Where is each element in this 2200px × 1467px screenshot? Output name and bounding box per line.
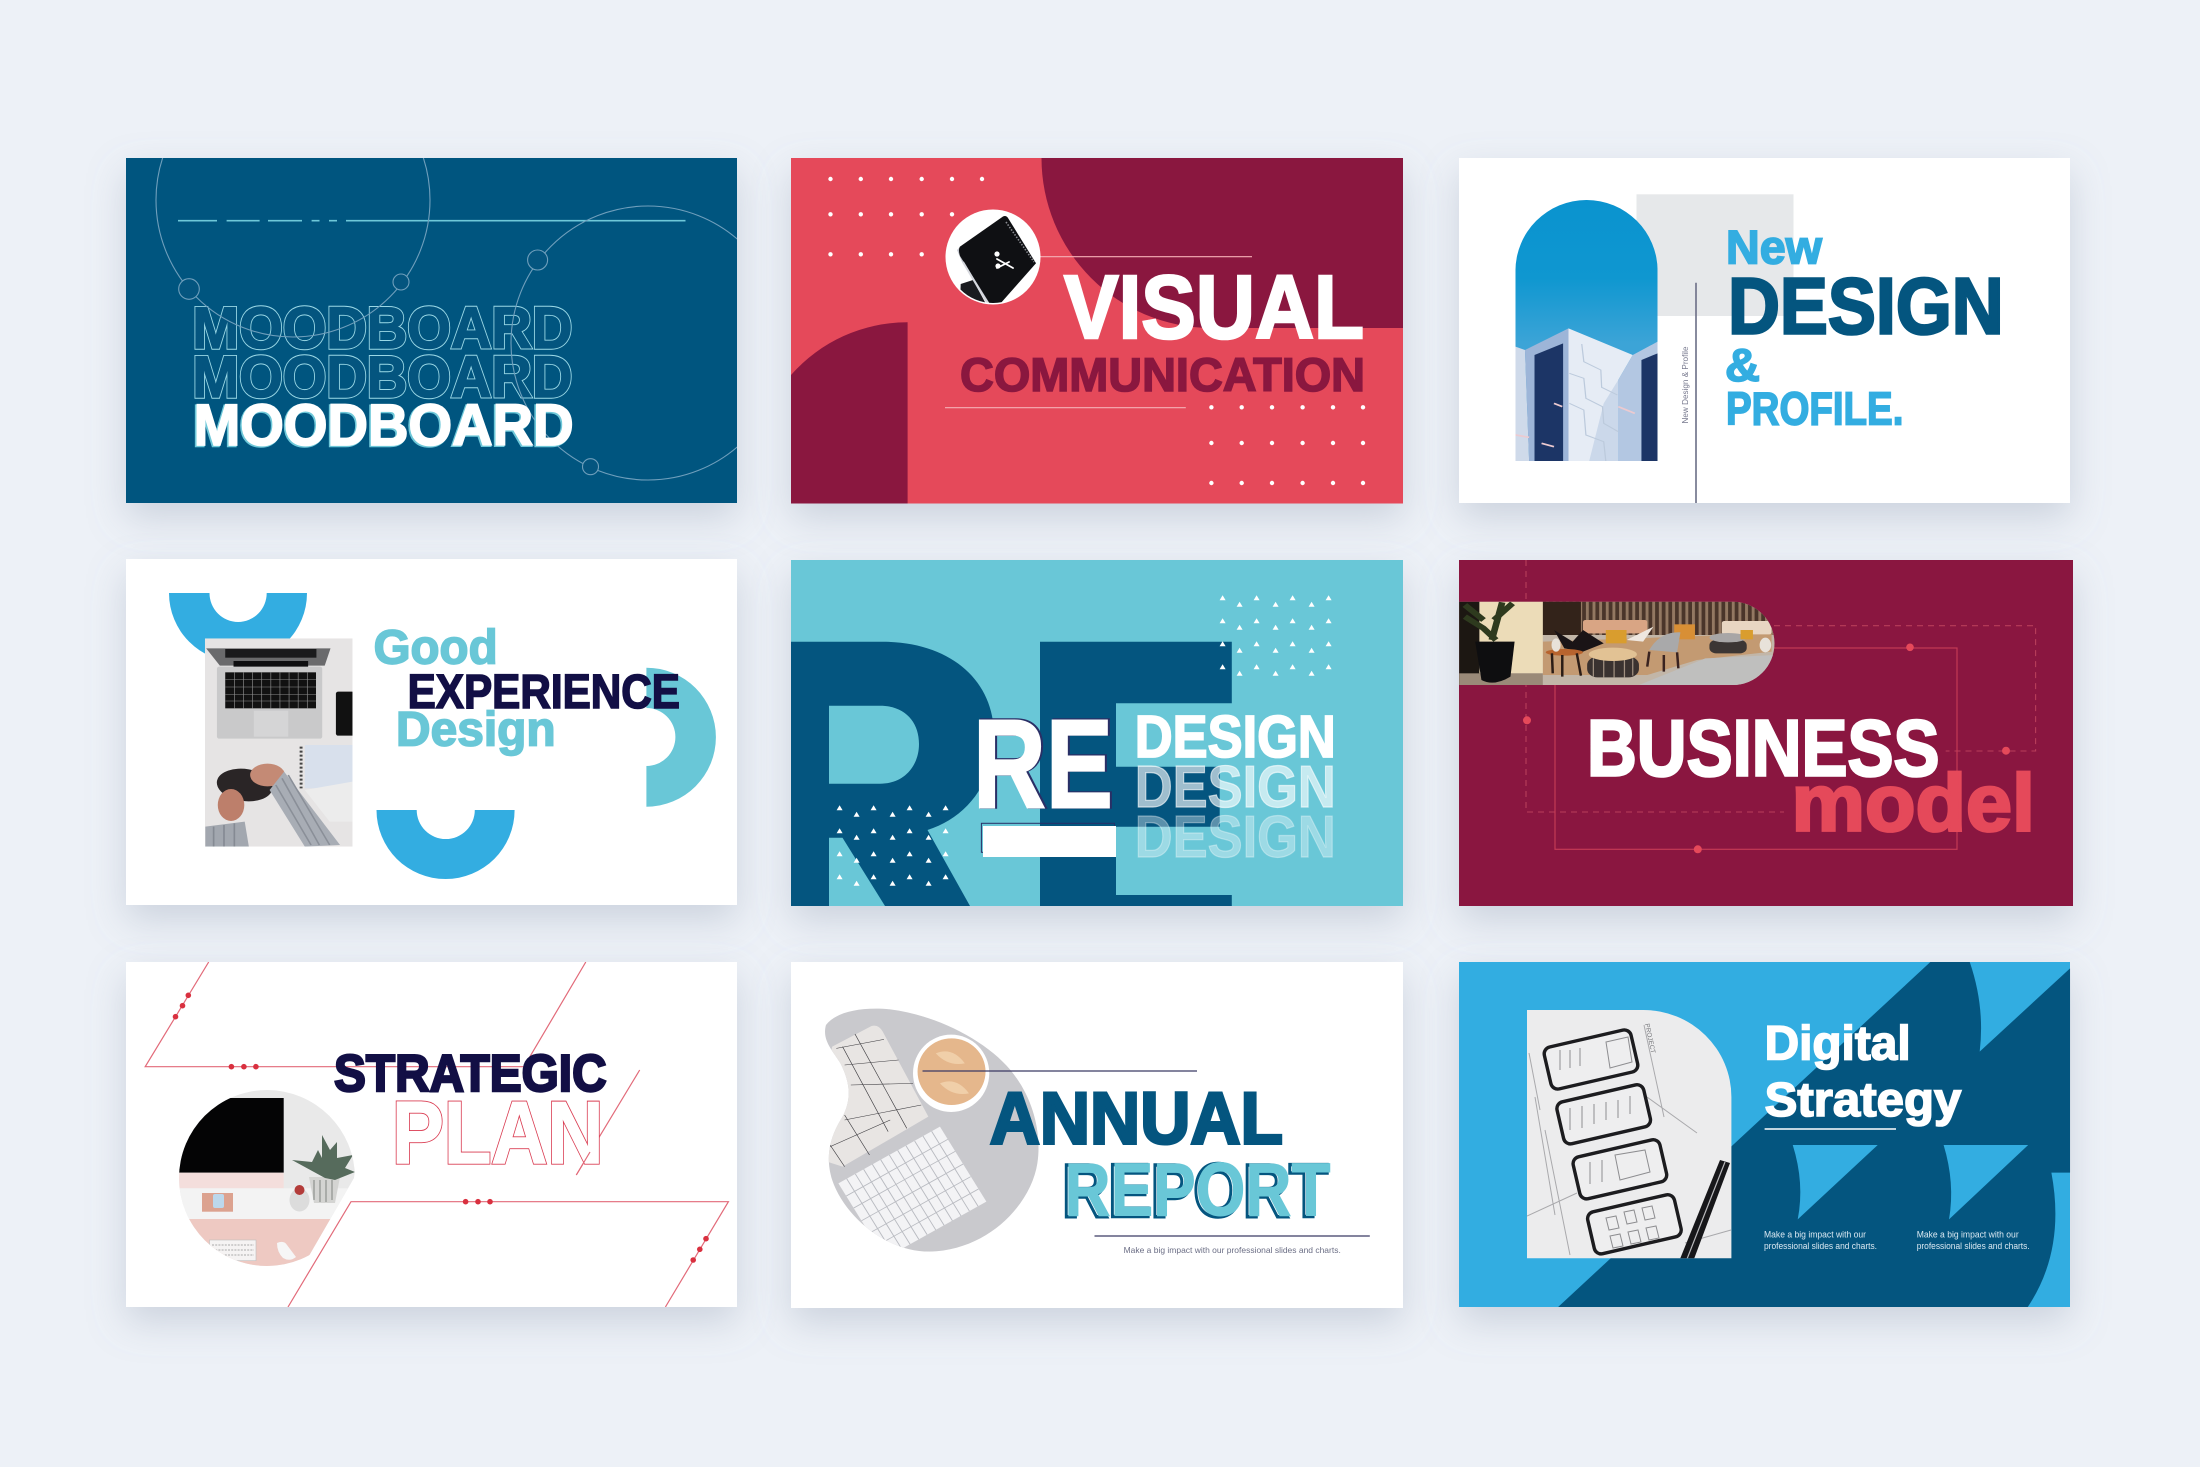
oversized letters xyxy=(791,642,1232,906)
rule lines xyxy=(945,257,1252,408)
panel: good experience design xyxy=(126,559,737,905)
rule line bottom xyxy=(1094,1235,1370,1237)
panel: business model xyxy=(1459,560,2073,906)
triangle grid top xyxy=(1220,595,1332,676)
grey block xyxy=(1636,194,1794,316)
panel: strategic plan xyxy=(126,962,737,1307)
photo: desk circle xyxy=(179,1089,355,1269)
photo: coffee and keyboard blob xyxy=(825,1008,1038,1252)
caption right: Make a big impact with our xyxy=(1917,1230,2019,1240)
DESIGN line three: DESIGN xyxy=(1135,804,1336,870)
title: STRATEGIC: STRATEGIC xyxy=(334,1045,607,1103)
DESIGN line one: DESIGN xyxy=(1135,704,1336,770)
photo: lounge interior xyxy=(1459,602,1779,685)
vertical rule xyxy=(1695,283,1697,503)
title: REPORT outline: REPORT xyxy=(1062,1149,1328,1233)
panel: annual report xyxy=(791,962,1403,1308)
RE outline: RE xyxy=(974,693,1114,834)
DESIGN line two: DESIGN xyxy=(1135,754,1336,820)
dashed line xyxy=(178,220,686,222)
dot grid bottom xyxy=(1209,405,1365,485)
heading underline xyxy=(1765,1128,1896,1130)
decorative circles xyxy=(155,158,737,480)
title: model: model xyxy=(1792,758,2035,848)
underline bar xyxy=(981,823,1116,857)
frame nodes xyxy=(1523,644,2010,853)
outlined title line two: MOODBOARD xyxy=(192,345,572,410)
panel: digital strategy xyxy=(1459,962,2070,1307)
solid title: MOODBOARD xyxy=(194,393,574,458)
caption left: Make a big impact with our xyxy=(1764,1230,1866,1240)
caption left: professional slides and charts. xyxy=(1764,1241,1877,1251)
arch photo: building xyxy=(1515,200,1658,461)
heading: Good: Good xyxy=(374,622,498,674)
half ring top xyxy=(169,593,307,662)
panel: moodboard xyxy=(114,158,750,530)
photo: app wireframes xyxy=(1527,1010,1732,1259)
navy geometric shapes xyxy=(1558,962,2070,1307)
title: PLAN: PLAN xyxy=(392,1083,604,1182)
title: PLAN: PLAN xyxy=(392,1083,604,1182)
heading: PROFILE: PROFILE. xyxy=(1726,382,1903,434)
outlined title line two: MOODBOARD xyxy=(192,345,572,410)
rule line top xyxy=(922,1070,1197,1072)
photo: app wireframes: PROJECT xyxy=(1643,1023,1656,1054)
solid title outline: MOODBOARD xyxy=(192,394,572,459)
maroon shapes xyxy=(791,158,1403,504)
line nodes xyxy=(173,992,709,1263)
photo: laptop and hands xyxy=(205,638,355,847)
heading: EXPERIENCE: EXPERIENCE xyxy=(408,666,680,719)
half ring bottom xyxy=(376,810,515,879)
title: BUSINESS: BUSINESS xyxy=(1587,704,1940,792)
heading: DESIGN: DESIGN xyxy=(1728,262,2004,350)
heading: Digital: Digital xyxy=(1765,1018,1911,1070)
parallel line frames xyxy=(145,962,728,1307)
panel: new design and profile xyxy=(1459,158,2070,503)
RE title: RE xyxy=(973,694,1113,834)
heading: ampersand: & xyxy=(1725,339,1760,391)
title: REPORT fill: REPORT xyxy=(1064,1148,1330,1232)
heading: Design: Design xyxy=(396,704,556,756)
triangle grid bottom xyxy=(837,805,949,886)
title: VISUAL: VISUAL xyxy=(1064,258,1364,358)
panel: redesign xyxy=(791,560,1403,906)
title: ANNUAL: ANNUAL xyxy=(990,1078,1283,1160)
heading: Strategy: Strategy xyxy=(1765,1074,1962,1127)
half ring right xyxy=(646,668,716,807)
caption: Make a big impact with our professional slides and charts. xyxy=(1124,1245,1341,1255)
outlined title line one: MOODBOARD xyxy=(192,296,572,361)
heading: New: New xyxy=(1726,220,1822,274)
solid frame xyxy=(1555,648,1957,849)
circular photo: notebook xyxy=(946,210,1040,305)
vertical caption: New Design & Profile xyxy=(1680,346,1690,424)
outlined title line one: MOODBOARD xyxy=(192,296,572,361)
dashed frames xyxy=(1526,560,2036,812)
dot grid top xyxy=(828,177,984,256)
title: COMMUNICATION: COMMUNICATION xyxy=(960,348,1365,401)
caption right: professional slides and charts. xyxy=(1917,1241,2030,1251)
panel: visual communication xyxy=(791,158,1403,504)
